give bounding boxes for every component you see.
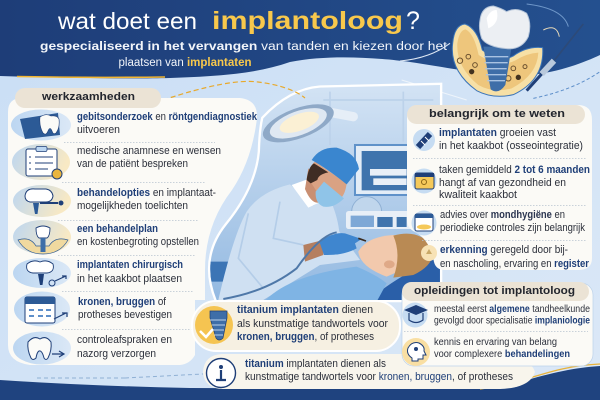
fact: erkenning — [440, 244, 590, 270]
patient — [266, 234, 433, 302]
subtitle: plaatsen van implantaten — [118, 57, 252, 69]
fact: erkenning: erkenning geregeld door bij- — [440, 244, 568, 256]
fact: duration: hangt af van gezondheid en — [439, 177, 566, 189]
dashed route — [163, 81, 305, 100]
callout: titanium info — [203, 354, 535, 389]
fact: erkenning: en nascholing, ervaring en register — [440, 258, 590, 270]
heading: belangrijk om te weten — [407, 105, 585, 124]
icon: screw — [413, 129, 435, 151]
text: opleiding: meestal eerst algemene tandheelkunde — [434, 304, 590, 315]
row: behandelopties: behandelopties en implantaat- — [77, 187, 216, 199]
header band — [0, 0, 600, 78]
heading: opleidingen tot implantoloog: opleidingen tot implantoloog — [414, 285, 575, 297]
subtitle: gespecialiseerd in het vervangen van tanden en kiezen door het — [40, 41, 448, 53]
icon: recognition — [421, 245, 437, 261]
heading: werkzaamheden: werkzaamheden — [41, 91, 135, 103]
dentist — [218, 148, 366, 300]
row: gebitsonderzoek: uitvoeren — [77, 124, 120, 136]
callout: titanium implantaten: als kunstmatige tandwortels voor — [237, 318, 388, 330]
icon: head with idea — [402, 338, 430, 366]
icon: yellow calendar — [412, 168, 436, 194]
heading: werkzaamheden — [15, 88, 161, 108]
heading: opleidingen tot implantoloog — [402, 282, 589, 301]
fact: duration — [439, 164, 590, 201]
row: kronen: kronen, bruggen of — [78, 296, 167, 308]
row: behandelopties: mogelijkheden toelichten — [77, 200, 188, 212]
icon: tooth aftercare — [13, 332, 71, 364]
panel: werkzaamheden — [8, 88, 258, 365]
panel: belangrijk om te weten — [37, 105, 593, 389]
scene: dentist treating patient — [200, 85, 440, 302]
icon: tooth x-ray — [11, 110, 71, 140]
fact: mondhygiene: advies over mondhygiëne en — [440, 209, 565, 221]
row: anamnese — [77, 145, 221, 170]
fact: duration: taken gemiddeld 2 tot 6 maanden — [439, 164, 590, 176]
icon: implant with check — [200, 311, 227, 340]
bottom dashed line — [37, 374, 203, 378]
row: gebitsonderzoek: gebitsonderzoek en röntgendiagnostiek — [77, 111, 258, 123]
row: kronen: protheses bevestigen — [78, 309, 172, 321]
row: gebitsonderzoek — [77, 111, 258, 136]
row: anamnese: medische anamnese en wensen — [77, 145, 221, 157]
fact: duration: kwaliteit kaakbot — [439, 189, 517, 201]
icon: treatment options — [13, 185, 71, 217]
icon: clipboard checklist — [12, 144, 70, 180]
fact: mondhygiene — [440, 209, 585, 234]
row: behandelopties — [77, 187, 216, 212]
title: ? — [406, 7, 420, 35]
icon: calendar — [14, 292, 70, 326]
icon: check-up calendar — [412, 210, 436, 236]
row: controle: controleafspraken en — [77, 334, 172, 346]
fact: osseointegratie: in het kaakbot (osseointegratie) — [439, 140, 583, 152]
text: opleiding: gevolgd door specialisatie implaniologie — [434, 316, 590, 326]
callout: titanium info: titanium implantaten dienen als — [245, 358, 386, 370]
row: controle — [77, 334, 172, 360]
icon: implant in jawbone — [400, 4, 600, 100]
title: implantoloog — [212, 7, 403, 35]
callout: titanium implantaten — [192, 301, 400, 351]
footer band — [0, 364, 600, 400]
text: ervaring — [434, 337, 570, 360]
fact: osseointegratie: implantaten groeien vast — [439, 127, 556, 139]
row: implantaten: implantaten chirurgisch — [77, 259, 183, 271]
panel: opleidingen tot implantoloog — [402, 282, 593, 366]
callout: titanium implantaten: kronen, bruggen, of protheses — [237, 331, 374, 343]
icon: info — [206, 358, 236, 388]
text: opleiding — [434, 304, 590, 326]
lamp — [262, 104, 358, 142]
row: behandelplan: en kostenbegroting opstellen — [77, 236, 199, 248]
icon: surgical implant — [13, 258, 71, 288]
title: wat doet een — [57, 8, 197, 34]
callout: titanium implantaten: titanium implantaten dienen — [237, 304, 373, 316]
x-ray monitor — [354, 144, 407, 196]
title — [57, 7, 420, 35]
dental chair — [378, 260, 440, 300]
text: ervaring: kennis en ervaring van belang — [434, 337, 557, 348]
row: anamnese: van de patiënt bespreken — [77, 158, 188, 170]
header underline — [17, 76, 165, 78]
text: ervaring: voor complexere behandelingen — [434, 349, 570, 360]
icon: graduation cap — [402, 302, 428, 328]
row: kronen — [78, 296, 172, 321]
console — [346, 196, 410, 229]
subtitle — [40, 41, 448, 69]
row: behandelplan: een behandelplan — [77, 223, 158, 235]
row: implantaten: in het kaakbot plaatsen — [77, 273, 182, 285]
row: implantaten — [77, 259, 183, 285]
callout: titanium info: kunstmatige tandwortels voor kronen, bruggen, of protheses — [245, 371, 513, 383]
icon: implant plan — [13, 220, 71, 254]
row: controle: nazorg verzorgen — [77, 348, 156, 360]
fact: osseointegratie — [439, 127, 583, 152]
row: behandelplan — [77, 223, 199, 248]
heading: belangrijk om te weten: belangrijk om te weten — [429, 108, 565, 120]
